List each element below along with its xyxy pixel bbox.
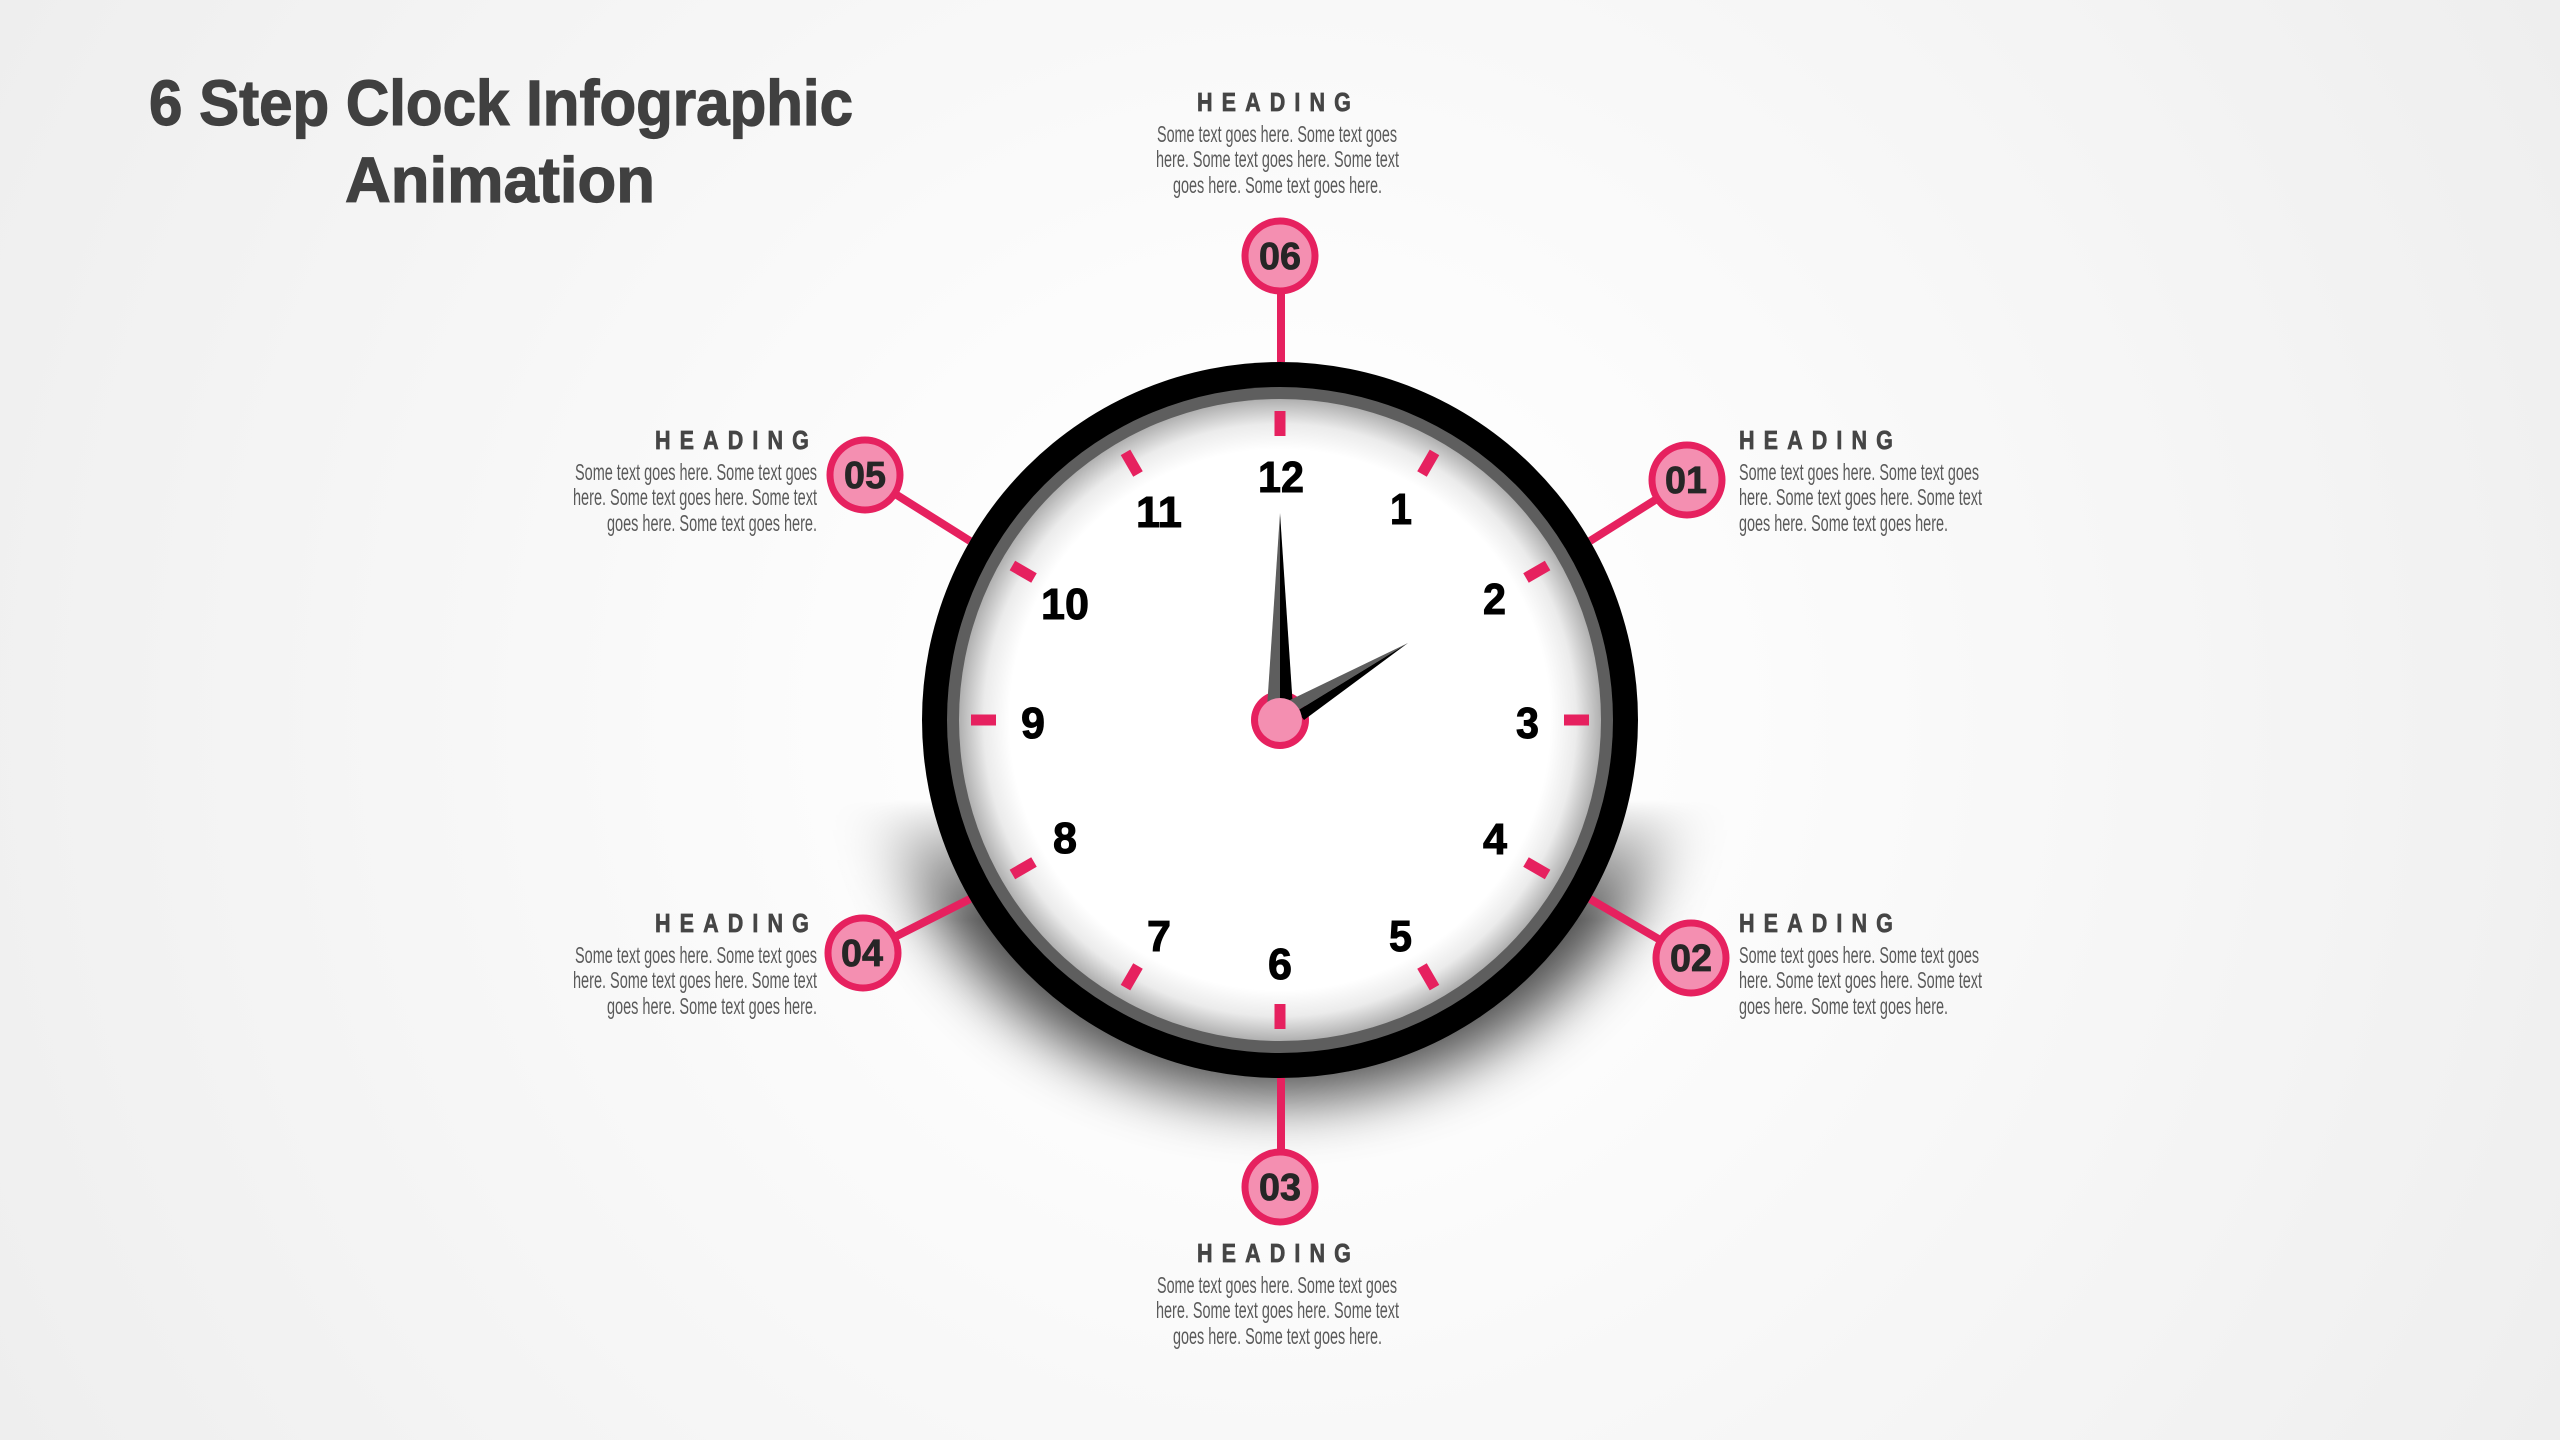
step 03 [1156, 1152, 1399, 1349]
step 03 badge: 03 [1259, 1167, 1301, 1209]
clock numerals: 9 [1021, 699, 1045, 748]
step 01 badge [1652, 445, 1722, 515]
clock numerals: 11 [1136, 488, 1182, 537]
step 04 text: goes here. Some text goes here. [607, 993, 817, 1019]
step 06 [1156, 87, 1399, 291]
clock numerals: 3 [1516, 699, 1539, 748]
step 02 text: goes here. Some text goes here. [1739, 993, 1948, 1019]
clock numerals: 4 [1483, 815, 1508, 864]
step 02 badge: 02 [1670, 938, 1712, 980]
step 02 [1656, 908, 1982, 1019]
clock grey ring [947, 387, 1613, 1053]
step 01 [1652, 425, 1982, 536]
clock numerals: 8 [1053, 814, 1077, 863]
step 02 text: Some text goes here. Some text goes [1739, 942, 1979, 968]
step 05 badge [830, 440, 900, 510]
clock numerals: 7 [1147, 912, 1171, 961]
step 06 text: HEADING [1197, 87, 1360, 117]
clock outer rim [922, 362, 1638, 1078]
step 06 badge: 06 [1259, 236, 1301, 278]
clock numerals [1021, 453, 1539, 989]
step 05 text: HEADING [655, 425, 818, 455]
step 06 text: Some text goes here. Some text goes [1157, 121, 1397, 147]
step 04 badge: 04 [841, 933, 883, 975]
step 04 text [573, 908, 818, 1019]
step 04 text: here. Some text goes here. Some text [573, 967, 817, 993]
step 02 text: here. Some text goes here. Some text [1739, 967, 1982, 993]
step 04 [573, 908, 898, 1019]
step 02 text: HEADING [1739, 908, 1902, 938]
minute hand [1267, 513, 1293, 708]
clock numerals: 1 [1390, 485, 1412, 534]
clock numerals: 12 [1258, 453, 1304, 502]
center pin [1258, 698, 1302, 742]
step 05 [573, 425, 900, 536]
title: Animation [345, 144, 655, 216]
step 01 text: goes here. Some text goes here. [1739, 510, 1948, 536]
step 05 text: goes here. Some text goes here. [607, 510, 817, 536]
clock numerals: 6 [1268, 940, 1292, 989]
step 01 text: here. Some text goes here. Some text [1739, 484, 1982, 510]
step 06 text [1156, 87, 1399, 198]
step 03 text: HEADING [1197, 1238, 1360, 1268]
step 03 text: here. Some text goes here. Some text [1156, 1297, 1399, 1323]
step 01 badge: 01 [1665, 460, 1707, 502]
title [149, 67, 853, 216]
step 04 text: Some text goes here. Some text goes [575, 942, 817, 968]
step 04 text: HEADING [655, 908, 818, 938]
step 03 text: Some text goes here. Some text goes [1157, 1272, 1397, 1298]
hour ticks [971, 411, 1589, 1029]
step 02 badge [1656, 923, 1726, 993]
step 03 text [1156, 1238, 1399, 1349]
step 05 badge: 05 [844, 455, 886, 497]
step 01 text: HEADING [1739, 425, 1902, 455]
center pin ring [1251, 691, 1309, 749]
step 03 text: goes here. Some text goes here. [1173, 1323, 1382, 1349]
step 06 badge [1245, 221, 1315, 291]
clock numerals: 2 [1483, 575, 1506, 624]
step 05 text [573, 425, 818, 536]
step 05 text: here. Some text goes here. Some text [573, 484, 817, 510]
clock numerals: 10 [1041, 580, 1089, 629]
step 04 badge [828, 918, 898, 988]
clock [922, 362, 1638, 1078]
step 05 text: Some text goes here. Some text goes [575, 459, 817, 485]
title: 6 Step Clock Infographic [149, 67, 853, 139]
step 02 text [1739, 908, 1982, 1019]
clock drop shadow [868, 806, 1692, 1146]
step 06 text: here. Some text goes here. Some text [1156, 146, 1399, 172]
step 01 text [1739, 425, 1982, 536]
step 01 text: Some text goes here. Some text goes [1739, 459, 1979, 485]
connector lines [863, 256, 1691, 1187]
step 06 text: goes here. Some text goes here. [1173, 172, 1382, 198]
step 03 badge [1245, 1152, 1315, 1222]
hour hand [1290, 643, 1408, 720]
clock numerals: 5 [1389, 912, 1412, 961]
clock face [959, 399, 1601, 1041]
